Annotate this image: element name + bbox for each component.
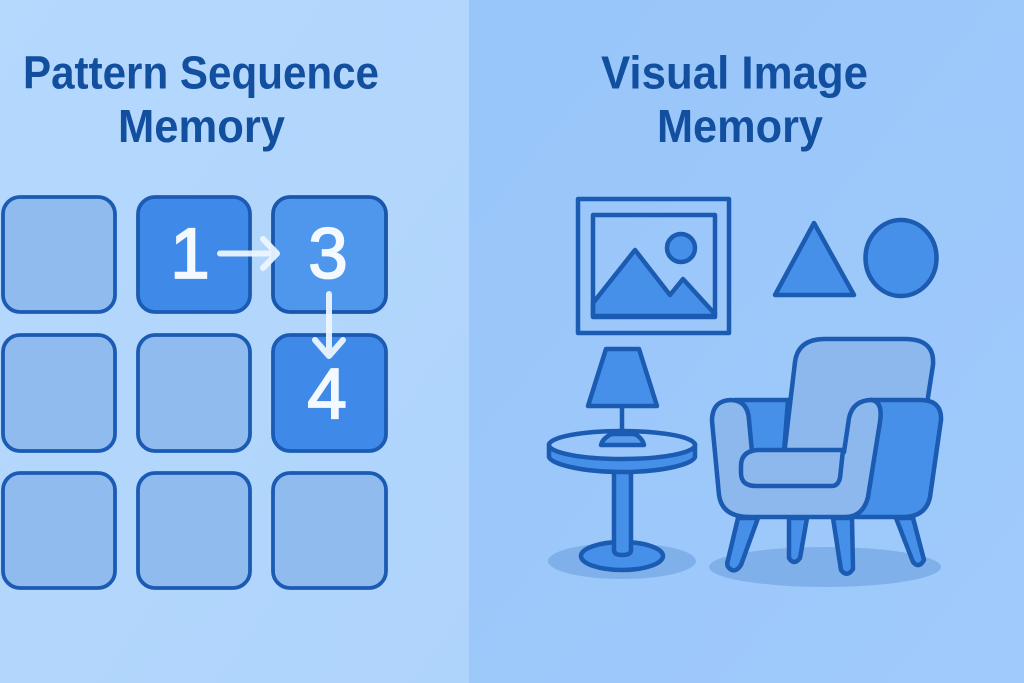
panel: visual image memory	[469, 0, 1024, 683]
table top	[549, 444, 695, 472]
lamp shade	[588, 349, 657, 406]
shadow: armchair	[709, 547, 941, 587]
shadow: table	[548, 543, 696, 579]
sequence numbers: 3	[308, 215, 348, 294]
table and lamp	[549, 349, 695, 570]
arrow: 3 to 4	[315, 294, 343, 356]
armchair	[712, 339, 941, 574]
icon: circle	[866, 220, 936, 296]
chair body and arms	[712, 400, 881, 517]
heading: pattern sequence memory: Memory	[118, 100, 285, 152]
lamp stem	[620, 406, 624, 434]
table pedestal	[614, 468, 631, 555]
heading: pattern sequence memory	[23, 46, 379, 152]
table base	[581, 542, 663, 570]
heading: visual image memory: Visual Image	[601, 46, 868, 98]
cell 3	[273, 197, 386, 312]
memory grid	[3, 197, 386, 588]
arrow: 1 to 3	[220, 239, 277, 268]
icon: framed picture	[578, 199, 729, 333]
cell 4	[273, 335, 386, 451]
icon: triangle	[775, 223, 854, 295]
heading: visual image memory: Memory	[657, 100, 823, 152]
sequence numbers: 1	[170, 215, 210, 294]
heading: pattern sequence memory: Pattern Sequence	[23, 46, 379, 98]
lamp base	[601, 434, 644, 445]
heading: visual image memory	[601, 46, 868, 152]
side panels	[735, 400, 788, 452]
panel: pattern sequence memory	[0, 0, 469, 683]
legs	[727, 518, 758, 570]
sequence numbers: 4	[307, 355, 347, 434]
seat cushion	[741, 450, 843, 486]
sequence numbers	[170, 215, 348, 434]
back cushion	[784, 339, 933, 455]
cell 1	[138, 197, 250, 312]
